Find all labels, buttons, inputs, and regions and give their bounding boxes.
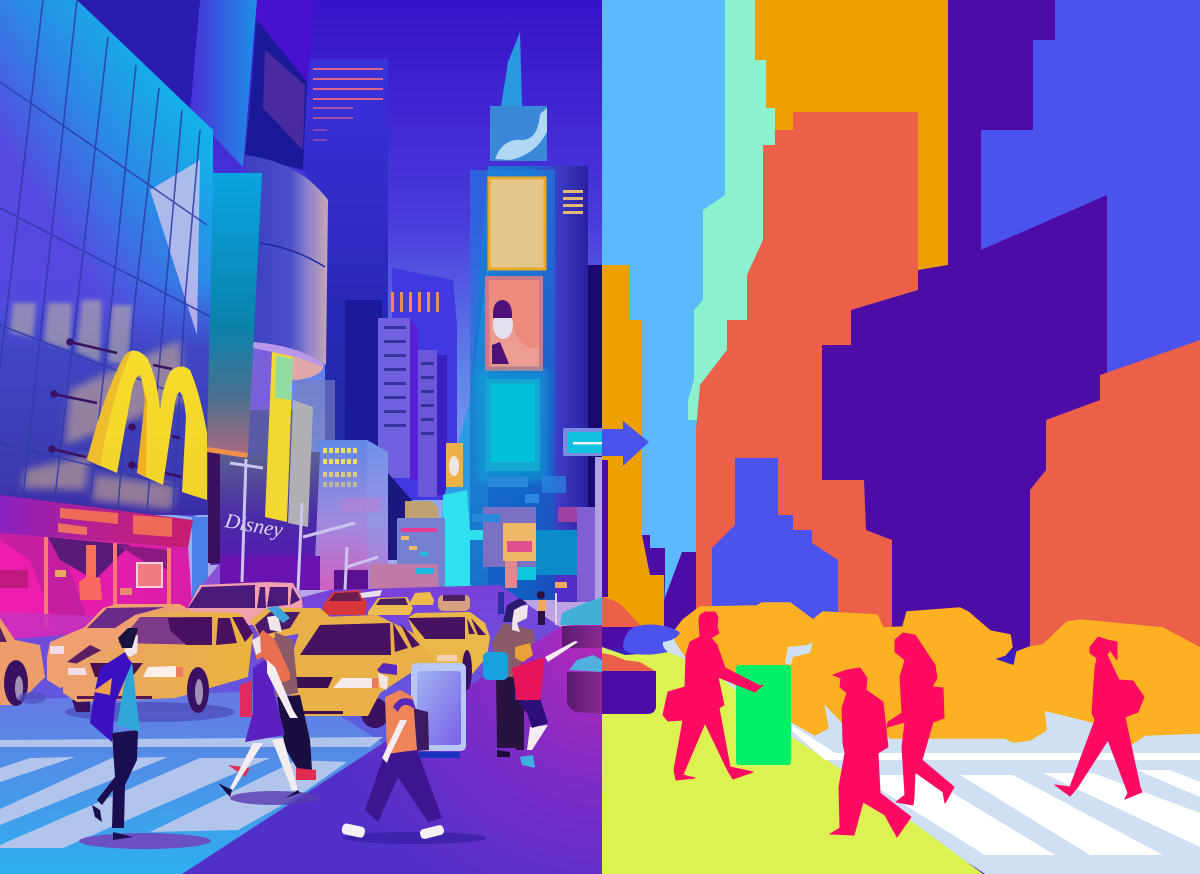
trash bin kiosk (411, 663, 466, 758)
taxi: rear behind center (250, 608, 336, 640)
pedestrian: man behind in hat (228, 606, 316, 780)
taxi: main left (63, 612, 253, 722)
far traffic (323, 590, 470, 615)
spire and rooftop sign (490, 32, 547, 161)
street lamps (230, 459, 378, 590)
street sign arrowhead crossing the split (602, 421, 649, 466)
building segment: dark purple tower (822, 0, 1107, 650)
coral mound (602, 597, 640, 628)
planter segment (602, 653, 656, 714)
mid-distance towers (378, 268, 457, 560)
pedestrian: man in blue jacket (79, 628, 211, 849)
person segment: man with bag (663, 612, 763, 780)
building segment: top orange (755, 0, 948, 300)
billboard: teal (477, 370, 549, 482)
sidewalk (182, 620, 602, 874)
crosswalk stripes (792, 725, 1200, 855)
panel: segmentation map (602, 0, 1200, 874)
pedestrians in the distance (498, 582, 567, 625)
taxi: salmon second car (47, 604, 193, 688)
storefront (0, 495, 195, 650)
building segment: coral right (1030, 340, 1200, 660)
yellow vertical sign (265, 352, 313, 527)
person segment: woman walking (887, 633, 954, 805)
purple below mound (602, 627, 682, 649)
building segment: mint (688, 0, 775, 420)
street sign arrow (563, 428, 603, 602)
pedestrian: woman in purple dress (218, 630, 320, 805)
person segment: ponytail runner (1055, 637, 1144, 799)
side sign with oval (446, 443, 463, 487)
minivan (188, 582, 304, 625)
road behind cars (0, 585, 560, 743)
billboard: cream (489, 178, 545, 269)
panel: illustrated street scene (0, 0, 603, 874)
building segment: small violet (712, 458, 838, 625)
taxi: right (408, 612, 490, 690)
pedestrians: mother and child (483, 598, 578, 768)
distant low buildings (317, 440, 445, 594)
Disney sign panel (190, 348, 320, 600)
planters (560, 597, 602, 714)
left glass facade building (0, 0, 213, 517)
object segment: white lamp (785, 642, 813, 665)
pedestrian: boy with backpack (341, 663, 487, 844)
car segment (673, 603, 1200, 745)
Disney logo text: Disney (222, 508, 285, 542)
building segment: small purple (642, 535, 665, 630)
ground segment: sidewalk (602, 647, 983, 874)
storefront poster (137, 563, 162, 587)
Times Square billboard tower (440, 166, 602, 605)
taxi: left edge (0, 618, 46, 706)
panels above the cylinder (77, 0, 313, 170)
sky segment (602, 0, 832, 640)
cylindrical building (245, 155, 328, 380)
orange bottom edge of teal panel (207, 447, 248, 458)
McDonald's golden arches (87, 350, 207, 500)
ground segment: crosswalk (660, 636, 1200, 874)
far tower with lit windows (303, 59, 388, 470)
billboard: portrait (487, 278, 541, 369)
crosswalk (0, 737, 383, 848)
object segment: green bin (736, 665, 791, 765)
blue blob segment (623, 624, 680, 655)
glass building behind left (295, 380, 335, 590)
person segment: man with cap (830, 668, 911, 837)
taxi: center (290, 615, 437, 728)
arch mounting rods (50, 340, 182, 477)
building segment: top-right violet (975, 0, 1200, 400)
building segment: coral center (696, 112, 918, 640)
road (0, 690, 383, 874)
building segment: left orange (602, 265, 664, 630)
teal billboard panel (207, 173, 262, 453)
